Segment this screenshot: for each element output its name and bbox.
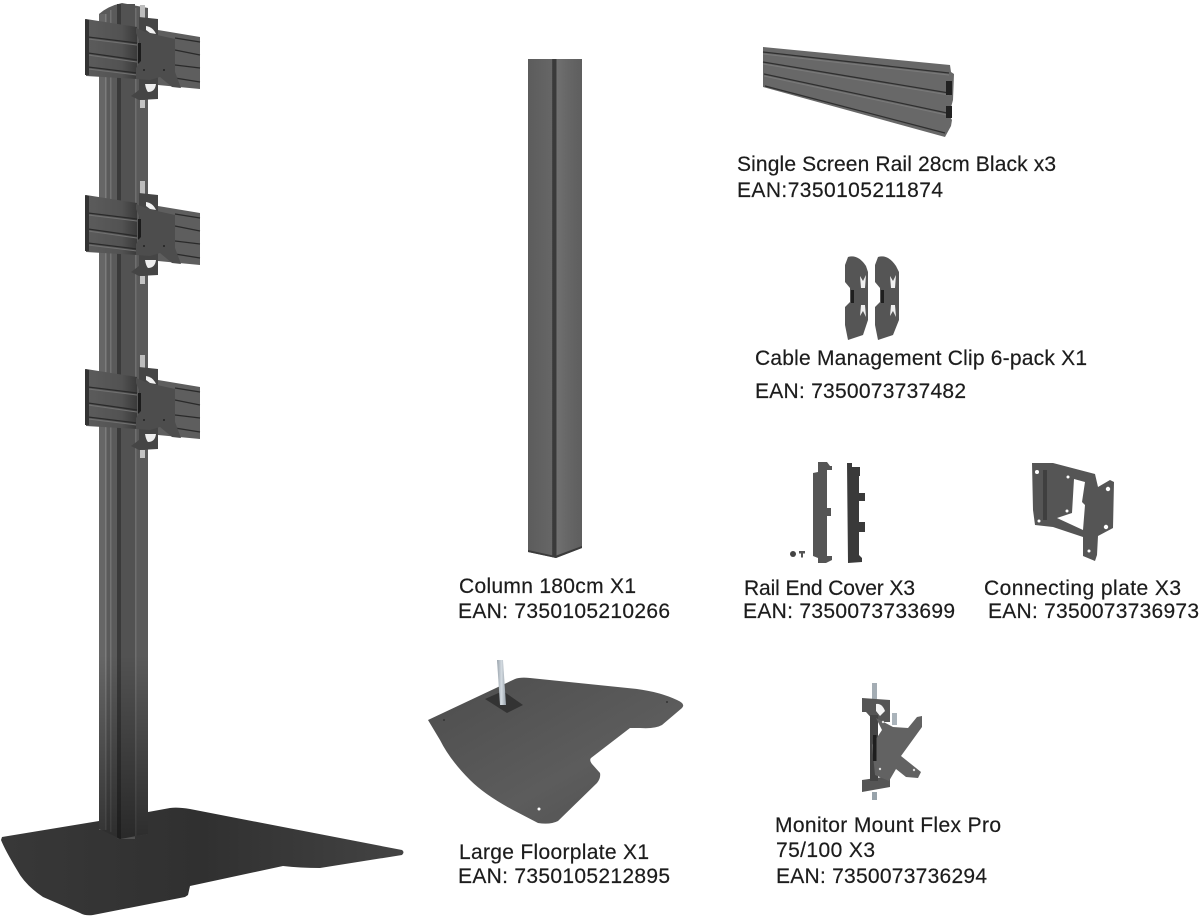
label: rail: Single Screen Rail 28cm Black x3 [737,153,1056,176]
clip right [875,256,899,340]
label: column: Column 180cm X1 [459,575,636,598]
product: connecting plate [1032,463,1114,561]
label: mount name line 2: 75/100 X3 [776,839,875,862]
floor base [1,808,404,915]
label: rail EAN: EAN:7350105211874 [737,179,943,202]
product: monitor mount [862,683,922,800]
column [99,3,148,839]
label: column EAN: EAN: 7350105210266 [458,600,670,623]
product: cable clips [845,256,899,340]
label: mount name line 1: Monitor Mount Flex Pro [775,814,1001,837]
label: connecting plate EAN: EAN: 7350073736973 [988,600,1199,623]
monitor bracket: middle [85,181,200,284]
label: end cover: Rail End Cover X3 [744,577,915,600]
label: mount EAN: EAN: 7350073736294 [776,865,987,888]
product: column [528,59,582,558]
product: large floorplate [428,660,683,824]
pole [497,660,506,705]
product: rail end cover [790,462,865,563]
label: end cover EAN: EAN: 7350073733699 [743,600,955,623]
monitor bracket: bottom [85,355,200,458]
product: single screen rail [763,47,954,137]
label: clip: Cable Management Clip 6-pack X1 [755,347,1087,370]
label: floorplate: Large Floorplate X1 [459,841,649,864]
product: assembled stand [1,3,404,915]
pole base [485,691,523,713]
monitor bracket: top [85,5,200,108]
clip left [845,256,868,340]
label: floorplate EAN: EAN: 7350105212895 [458,865,670,888]
label: connecting plate: Connecting plate X3 [984,577,1181,600]
label: clip EAN: EAN: 7350073737482 [755,380,966,403]
